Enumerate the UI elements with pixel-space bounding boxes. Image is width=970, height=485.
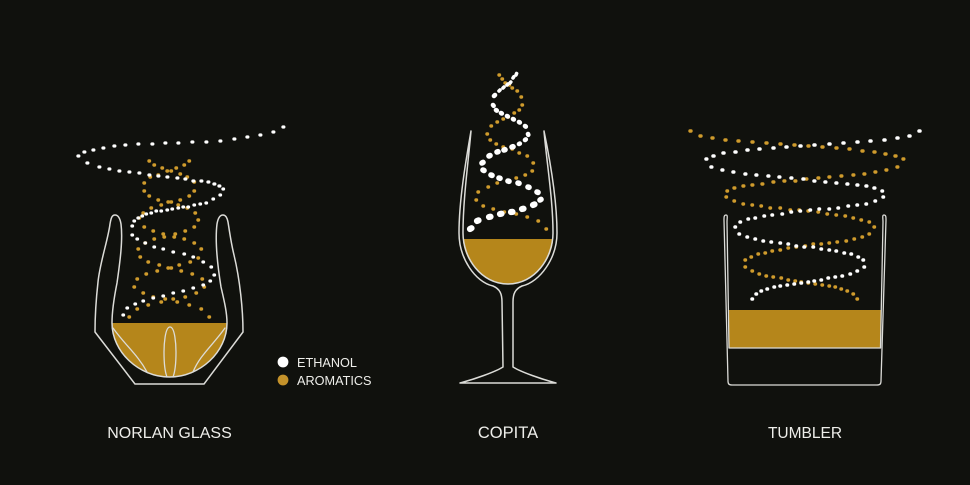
legend swatch: aromatics: [278, 375, 288, 385]
legend label: aromatics: AROMATICS: [297, 374, 371, 388]
aromatics dots: Copita: [476, 75, 546, 229]
glass outline: Copita: [459, 131, 557, 383]
legend swatch: ethanol: [278, 357, 288, 367]
ethanol dots: Copita, largest: [470, 204, 534, 229]
ethanol dots: Norlan: [78, 127, 284, 315]
aromatics dots: Norlan: [129, 161, 210, 317]
label: Tumbler: TUMBLER: [768, 425, 842, 442]
aromatics dots: Tumbler: [690, 131, 904, 299]
legend: [278, 356, 371, 388]
whisky fill: Copita: [463, 239, 553, 284]
panel: Tumbler glass: [690, 131, 920, 385]
ethanol dots: Copita, medium: [493, 95, 528, 144]
label: Norlan glass: NORLAN GLASS: [107, 425, 232, 442]
label: Copita: COPITA: [478, 424, 538, 442]
ethanol dots: Copita, large: [482, 147, 541, 200]
whisky fill: Norlan: [112, 323, 227, 377]
panel: Norlan glass: [78, 127, 284, 384]
legend label: ethanol: ETHANOL: [297, 356, 357, 370]
panel: Copita glass: [459, 74, 557, 383]
ethanol dots: Tumbler: [706, 131, 920, 299]
glass outline: Norlan: [95, 215, 243, 384]
ethanol dots: Copita, small: [499, 74, 517, 91]
glass outline: Tumbler: [724, 215, 886, 385]
inner glass petals: [113, 327, 225, 377]
whisky fill: Tumbler: [728, 310, 881, 348]
